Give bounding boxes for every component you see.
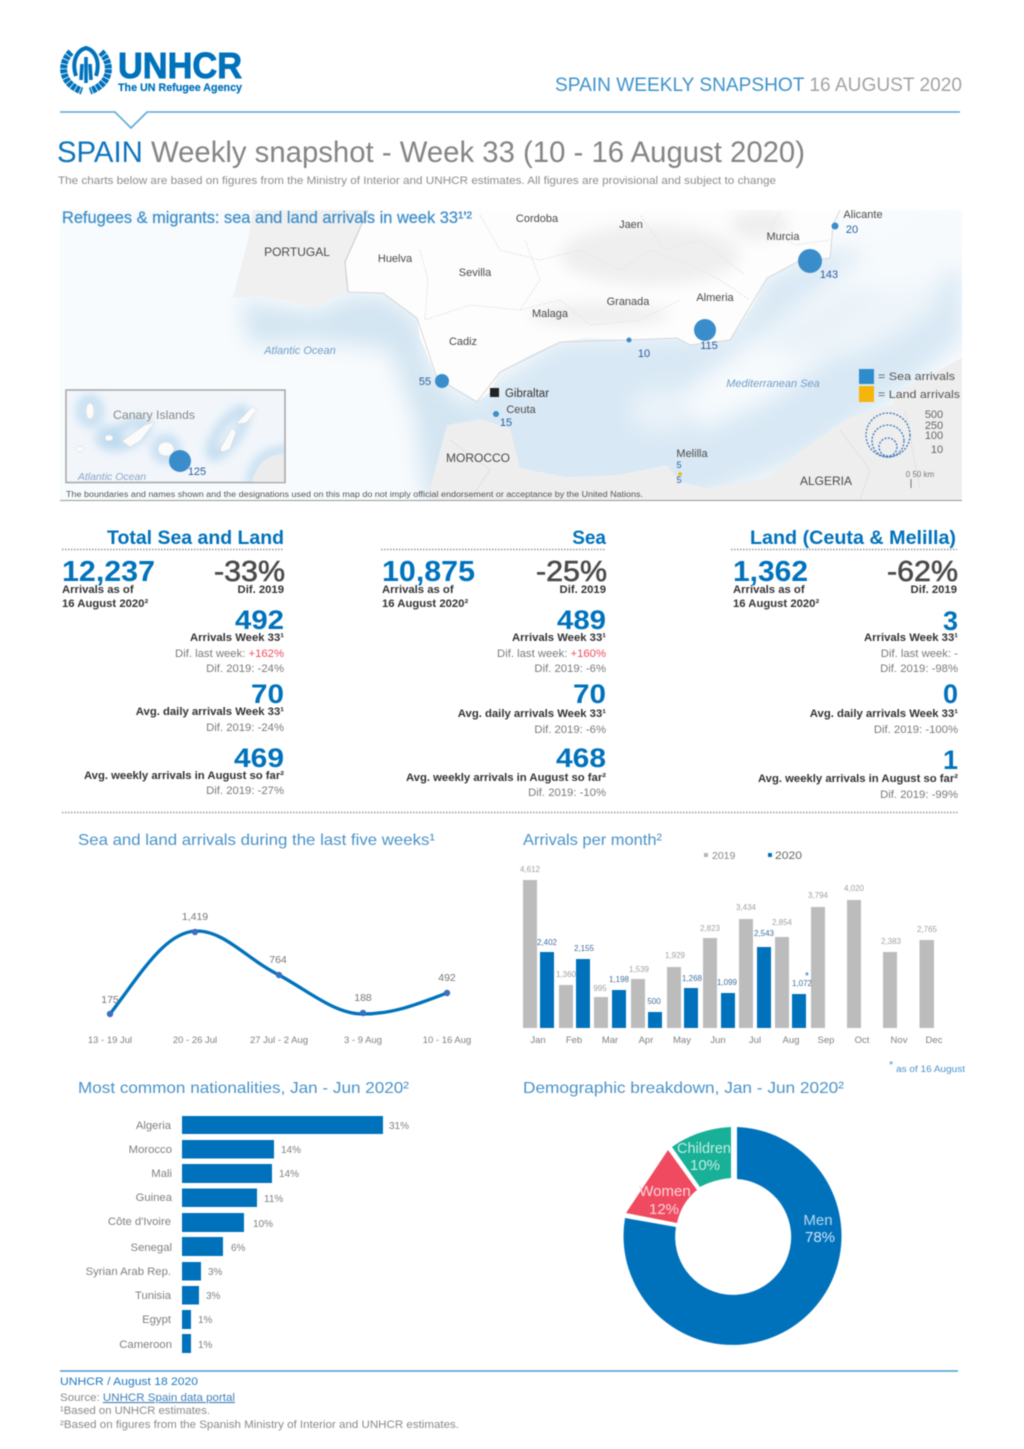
values 2020: 2,155 xyxy=(574,944,595,953)
slice: women xyxy=(626,1150,697,1223)
values 2019: 3,794 xyxy=(808,891,829,900)
place labels: Jaen xyxy=(619,219,643,231)
country labels: Morocco xyxy=(129,1144,172,1156)
month labels: Nov xyxy=(891,1035,908,1046)
place labels: Gibraltar xyxy=(505,388,549,400)
axis labels: 10 - 16 Aug xyxy=(423,1035,471,1046)
place labels: Mediterranean Sea xyxy=(726,378,820,390)
arrival values xyxy=(419,224,858,485)
values: 188 xyxy=(354,992,372,1004)
country labels xyxy=(86,1120,173,1351)
footer: Source: UNHCR Spain data portal xyxy=(60,1392,235,1404)
panel: nationalities xyxy=(78,1080,410,1353)
country labels: Guinea xyxy=(136,1192,173,1204)
place labels: Murcia xyxy=(766,231,800,243)
country labels: Cameroon xyxy=(119,1339,172,1351)
month labels: Jun xyxy=(710,1035,726,1046)
panel: demographic donut xyxy=(523,1080,845,1345)
values 2019: 2,854 xyxy=(772,918,793,927)
arrival values: 15 xyxy=(500,417,512,429)
icon: Gibraltar marker xyxy=(490,388,499,397)
month labels: Feb xyxy=(566,1035,582,1046)
legend: 250 xyxy=(925,420,943,432)
panel: sea: Arrivals Week 33¹ xyxy=(512,632,606,644)
panel: total sea and land: 469 xyxy=(234,743,284,773)
country labels: Syrian Arab Rep. xyxy=(86,1266,171,1278)
month labels: Jan xyxy=(530,1035,546,1046)
place labels: MOROCCO xyxy=(446,451,510,465)
slice: children xyxy=(672,1127,731,1187)
legend: 500 xyxy=(925,409,943,421)
panel: arrivals per month xyxy=(520,832,966,1074)
arrival circles xyxy=(435,222,838,476)
panel: sea: Dif. 2019: -6% xyxy=(534,724,606,736)
legend: 100 xyxy=(925,430,943,442)
panel: land: 0 xyxy=(943,679,958,709)
month labels: Mar xyxy=(602,1035,618,1046)
legend: 2020 xyxy=(775,850,802,862)
panel: sea: Dif. 2019: -6% xyxy=(534,663,606,675)
panel: total sea and land: 12,237 xyxy=(62,556,155,588)
panel: sea: 70 xyxy=(573,679,606,709)
values 2019: 4,020 xyxy=(844,884,865,893)
footer xyxy=(60,1376,459,1431)
bars 2019 xyxy=(523,880,934,1028)
legend xyxy=(704,850,802,862)
panel: land: Dif. 2019: -99% xyxy=(880,789,958,801)
wordmark: UNHCR xyxy=(118,45,242,86)
footer: ¹Based on UNHCR estimates. xyxy=(60,1405,210,1417)
axis labels: 27 Jul - 2 Aug xyxy=(250,1035,308,1046)
slice labels: 78% xyxy=(805,1229,835,1246)
place labels: Ceuta xyxy=(506,404,537,416)
subtitle: The charts below are based on figures from the Ministry of Interior and UNHCR estimates. All figures are provisional and subject to change xyxy=(58,175,776,187)
values 2020: 1,268 xyxy=(682,974,703,983)
values 2020: 1,072 xyxy=(792,979,813,988)
tagline: The UN Refugee Agency xyxy=(118,82,243,94)
place labels: Alicante xyxy=(843,209,883,221)
values 2019: 4,612 xyxy=(520,865,541,874)
sea shading xyxy=(236,244,962,500)
panel: total sea and land: 70 xyxy=(251,679,284,709)
country labels: Egypt xyxy=(142,1314,172,1326)
slice: men xyxy=(624,1127,842,1345)
panel: land: Land (Ceuta & Melilla) xyxy=(750,528,956,549)
arrival values: 10 xyxy=(638,348,650,360)
panel: land: 1 xyxy=(943,745,958,775)
logo: UNHCR xyxy=(64,45,243,94)
percent labels: 11% xyxy=(264,1194,283,1205)
panel: sea: 489 xyxy=(557,605,606,635)
panel: total sea and land: 16 August 2020² xyxy=(62,598,148,610)
panel: total sea and land: Dif. last week: +162% xyxy=(175,648,284,660)
legend: 10 xyxy=(931,444,943,456)
line xyxy=(110,931,447,1014)
footer: ²Based on figures from the Spanish Ministry of Interior and UNHCR estimates. xyxy=(60,1419,459,1431)
values 2019: 2,765 xyxy=(917,925,938,934)
values 2020: * xyxy=(805,971,809,982)
percent labels: 6% xyxy=(231,1243,246,1254)
country labels: Mali xyxy=(151,1168,172,1180)
footnote: * xyxy=(889,1060,893,1071)
place labels: Cadiz xyxy=(449,336,477,348)
month labels: Sep xyxy=(818,1035,834,1046)
slice labels: Women xyxy=(639,1183,691,1200)
percent labels: 10% xyxy=(253,1219,273,1230)
panel: total sea and land: Arrivals Week 33¹ xyxy=(190,632,284,644)
panel: land: 1,362 xyxy=(733,556,808,588)
panel: land: Arrivals Week 33¹ xyxy=(864,632,958,644)
percent labels: 14% xyxy=(281,1145,301,1156)
country labels: Tunisia xyxy=(135,1290,172,1302)
month labels: Oct xyxy=(855,1035,870,1046)
panel: land xyxy=(731,528,958,801)
values xyxy=(101,911,456,1006)
inset: Canary Islands xyxy=(66,390,290,485)
map disclaimer: The boundaries and names shown and the designations used on this map do not imply official endorsement or acceptance by the United Nations. xyxy=(66,490,643,499)
percent labels xyxy=(198,1121,409,1351)
place labels: ALGERIA xyxy=(800,474,852,488)
place labels: Almeria xyxy=(696,292,735,304)
country labels: Senegal xyxy=(131,1242,172,1254)
arrival values: 55 xyxy=(419,376,431,388)
axis labels xyxy=(88,1035,471,1046)
percent labels: 31% xyxy=(389,1121,409,1132)
map heading: Refugees & migrants: sea and land arrivals in week 33¹'² xyxy=(62,209,472,227)
panel: sea: Dif. last week: +160% xyxy=(497,648,606,660)
panel: sea: Avg. weekly arrivals in August so far² xyxy=(406,772,606,784)
land: Portugal, Spain, Morocco, Algeria xyxy=(233,210,368,308)
values: 764 xyxy=(269,954,287,966)
heading: Most common nationalities, Jan - Jun 2020² xyxy=(78,1080,410,1097)
values 2019: 1,929 xyxy=(665,951,686,960)
panel: map xyxy=(60,190,962,500)
heading: Arrivals per month² xyxy=(523,832,663,849)
footer: UNHCR / August 18 2020 xyxy=(60,1376,198,1388)
place labels xyxy=(263,209,883,488)
panel: land: 16 August 2020² xyxy=(733,598,819,610)
footnote: as of 16 August xyxy=(893,1064,966,1074)
panel: land: Dif. 2019: -98% xyxy=(880,663,958,675)
legend: = Sea arrivals xyxy=(878,371,956,383)
values: 492 xyxy=(438,972,456,984)
place labels: Sevilla xyxy=(459,267,492,279)
inner boundaries xyxy=(420,212,920,500)
panel: land: Dif. 2019 xyxy=(911,584,957,596)
month labels: Aug xyxy=(783,1035,799,1046)
percent labels: 1% xyxy=(198,1315,213,1326)
panel: land: Avg. daily arrivals Week 33¹ xyxy=(810,708,958,720)
place labels: Atlantic Ocean xyxy=(263,345,336,357)
slice labels: 10% xyxy=(690,1157,720,1174)
panel: sea xyxy=(381,528,607,799)
values 2019: 1,539 xyxy=(629,965,650,974)
arrival values: 143 xyxy=(820,269,838,281)
place labels: Melilla xyxy=(676,448,708,460)
values 2019: 3,434 xyxy=(736,903,757,912)
panel: land: Avg. weekly arrivals in August so far² xyxy=(758,773,958,785)
panel: total sea and land: Avg. daily arrivals Week 33¹ xyxy=(136,706,284,718)
percent labels: 3% xyxy=(208,1267,223,1278)
arrival values: 5 xyxy=(676,460,682,470)
legend: 0 50 km xyxy=(906,470,935,479)
panel: sea: Arrivals as of xyxy=(382,584,454,596)
arrival values: 115 xyxy=(700,340,718,352)
legend: = Land arrivals xyxy=(878,389,961,401)
values 2019: 1,360 xyxy=(556,970,577,979)
country labels: Côte d'Ivoire xyxy=(108,1216,171,1228)
values 2019 xyxy=(520,865,938,993)
month labels: Dec xyxy=(926,1035,943,1046)
bars xyxy=(182,1116,383,1353)
values 2020: 1,099 xyxy=(717,978,738,987)
axis labels: 13 - 19 Jul xyxy=(88,1035,132,1046)
place labels: Granada xyxy=(607,296,650,308)
panel: land: Dif. 2019: -100% xyxy=(874,724,958,736)
values 2020: 2,543 xyxy=(754,929,775,938)
panel: land: Arrivals as of xyxy=(733,584,805,596)
place labels: Cordoba xyxy=(516,213,559,225)
percent labels: 14% xyxy=(279,1169,299,1180)
inset: Canary Islands: 125 xyxy=(188,466,206,478)
axis labels: 3 - 9 Aug xyxy=(344,1035,382,1046)
panel: sea: 16 August 2020² xyxy=(382,598,468,610)
bars 2020 xyxy=(540,947,806,1028)
values 2019: 2,383 xyxy=(881,937,902,946)
legend xyxy=(859,369,961,488)
values 2020: 500 xyxy=(647,997,661,1006)
heading: Demographic breakdown, Jan - Jun 2020² xyxy=(523,1080,845,1097)
panel: land: 3 xyxy=(943,606,958,636)
month labels: Jul xyxy=(749,1035,761,1046)
values 2019: 2,823 xyxy=(700,924,721,933)
panel: land: -62% xyxy=(887,556,958,588)
panel: land: Dif. last week: - xyxy=(881,648,958,660)
values 2020: 1,198 xyxy=(609,975,630,984)
panel: total sea and land: Dif. 2019: -27% xyxy=(206,785,284,797)
values: 1,419 xyxy=(182,911,208,923)
values 2019: 995 xyxy=(593,984,607,993)
icon: UNHCR emblem xyxy=(64,48,108,91)
percent labels: 1% xyxy=(198,1340,213,1351)
panel: sea: Avg. daily arrivals Week 33¹ xyxy=(458,708,606,720)
values 2020: 2,402 xyxy=(537,938,558,947)
panel: total sea and land: Total Sea and Land xyxy=(107,528,284,549)
panel: sea: 468 xyxy=(556,743,606,773)
month labels xyxy=(530,1035,943,1046)
panel: total sea and land: 492 xyxy=(235,605,284,635)
panel: total sea and land: Arrivals as of xyxy=(62,584,134,596)
slice labels: Men xyxy=(803,1212,833,1229)
country labels: Algeria xyxy=(136,1120,172,1132)
panel: sea: Dif. 2019 xyxy=(560,584,606,596)
slice labels: 12% xyxy=(649,1201,679,1218)
panel: sea: Sea xyxy=(572,528,606,549)
slice labels: Children xyxy=(677,1140,731,1157)
heading: Sea and land arrivals during the last five weeks¹ xyxy=(78,832,435,849)
values 2020 xyxy=(537,929,813,1006)
points xyxy=(107,929,450,1017)
panel: total sea and land: Dif. 2019: -24% xyxy=(206,663,284,675)
legend: 2019 xyxy=(712,850,736,862)
panel: sea: 10,875 xyxy=(382,556,475,588)
slice labels xyxy=(639,1140,835,1246)
panel: total sea and land: -33% xyxy=(214,556,285,588)
land relief xyxy=(544,212,784,326)
panel: sea: -25% xyxy=(536,556,607,588)
title: SPAIN Weekly snapshot - Week 33 (10 - 16 August 2020) xyxy=(57,136,805,169)
panel: total sea and land: Dif. 2019: -24% xyxy=(206,722,284,734)
panel: five weeks line chart xyxy=(78,832,471,1046)
panel: total sea and land xyxy=(62,528,285,797)
arrival values: 5 xyxy=(676,475,682,485)
header label: SPAIN WEEKLY SNAPSHOT 16 AUGUST 2020 xyxy=(555,75,962,96)
arrival values: 20 xyxy=(846,224,858,236)
percent labels: 3% xyxy=(206,1291,221,1302)
panel: sea: Dif. 2019: -10% xyxy=(528,787,606,799)
inset: Canary Islands: Atlantic Ocean xyxy=(77,471,146,483)
panel: total sea and land: Dif. 2019 xyxy=(238,584,284,596)
month labels: Apr xyxy=(639,1035,653,1046)
axis labels: 20 - 26 Jul xyxy=(173,1035,217,1046)
inset: Canary Islands: Canary Islands xyxy=(113,408,195,422)
place labels: Malaga xyxy=(532,308,569,320)
place labels: PORTUGAL xyxy=(264,245,330,259)
month labels: May xyxy=(673,1035,691,1046)
values: 175 xyxy=(101,994,119,1006)
panel: total sea and land: Avg. weekly arrivals in August so far² xyxy=(84,770,284,782)
place labels: Huelva xyxy=(378,253,413,265)
